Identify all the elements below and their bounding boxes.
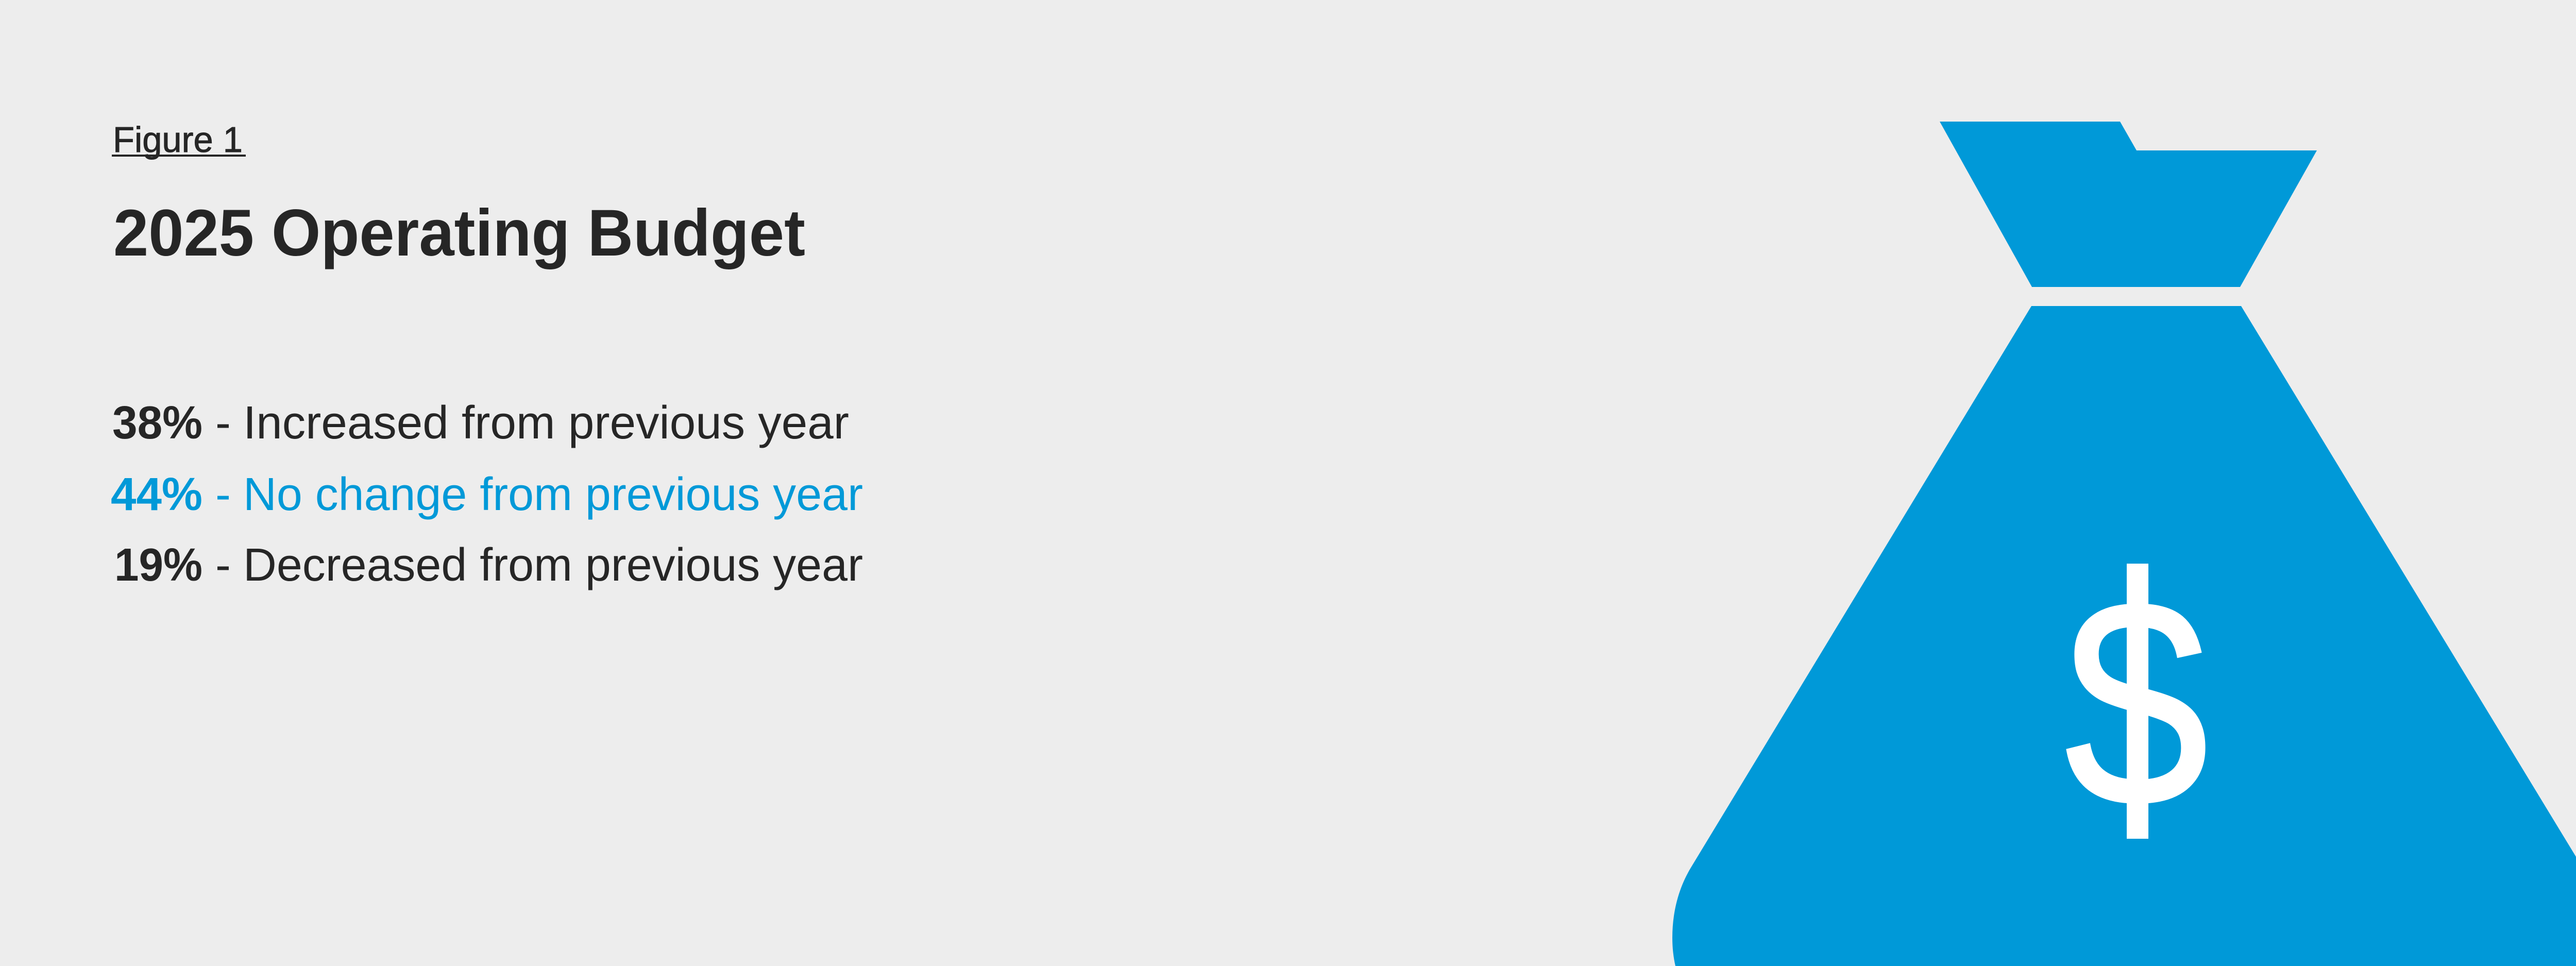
figure label: Figure 1 <box>113 120 243 160</box>
legend: increased: - <box>215 397 231 449</box>
legend: increased: 38% <box>112 397 202 449</box>
bag knot <box>1940 122 2317 287</box>
legend: decreased: Decreased from previous year <box>243 539 863 591</box>
dollar sign: $ <box>2065 538 2208 868</box>
legend: no change: - <box>215 469 231 520</box>
legend: no change: 44% <box>111 469 202 520</box>
legend: decreased: - <box>215 539 231 591</box>
title: 2025 Operating Budget <box>113 196 805 270</box>
legend: no change: No change from previous year <box>243 469 863 520</box>
legend: increased: Increased from previous year <box>243 397 849 449</box>
icon: money bag <box>1672 122 2576 966</box>
legend: decreased: 19% <box>114 539 202 591</box>
bag body <box>1672 306 2576 966</box>
